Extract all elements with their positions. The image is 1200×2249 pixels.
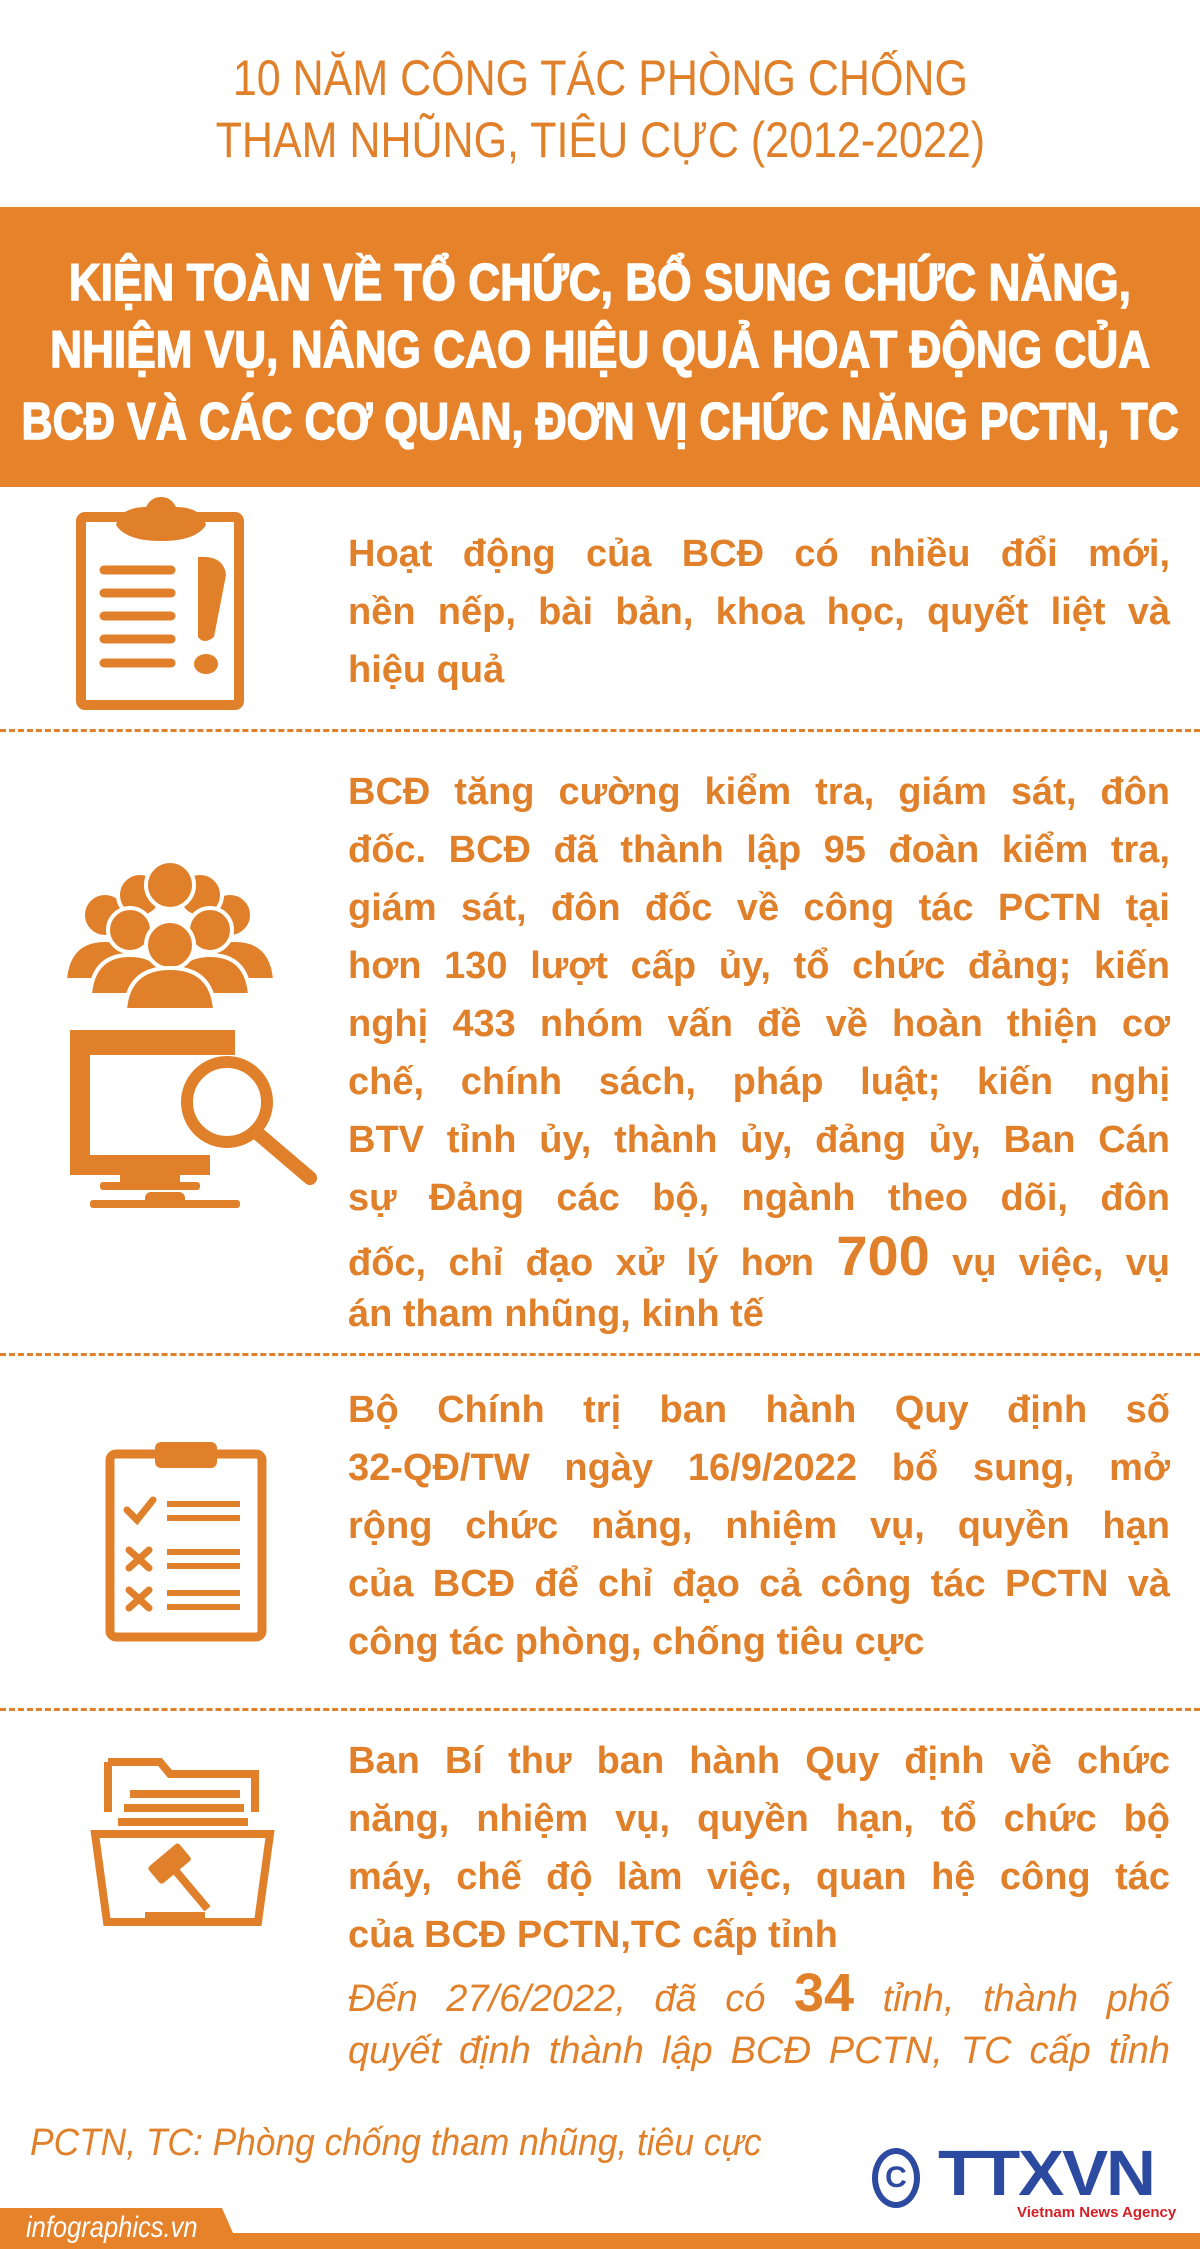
- title: 10 NĂM CÔNG TÁC PHÒNG CHỐNG: [232, 50, 968, 106]
- text block 2: hơn 130 lượt cấp ủy, tổ chức đảng; kiến: [348, 945, 1170, 987]
- text block 4: Đến 27/6/2022, đã có 34 tỉnh, thành phố: [348, 1963, 1170, 2023]
- text block 4: quyết định thành lập BCĐ PCTN, TC cấp tỉnh: [348, 2030, 1170, 2072]
- logo: TTXVN: [872, 2137, 1176, 2221]
- text block 1: nền nếp, bài bản, khoa học, quyết liệt và: [348, 591, 1170, 633]
- title: [215, 50, 985, 168]
- text block 2: nghị 433 nhóm vấn đề về hoàn thiện cơ: [348, 1003, 1170, 1045]
- banner: [0, 207, 1200, 487]
- text block 2: giám sát, đôn đốc về công tác PCTN tại: [348, 887, 1170, 929]
- text block 3: 32-QĐ/TW ngày 16/9/2022 bổ sung, mở: [348, 1447, 1170, 1489]
- text block 2: BCĐ tăng cường kiểm tra, giám sát, đôn: [348, 771, 1170, 813]
- icon: checklist: [106, 1442, 266, 1642]
- text block 3: Bộ Chính trị ban hành Quy định số: [348, 1389, 1170, 1431]
- footer bar: infographics.vn: [26, 2211, 198, 2244]
- text block 3: [348, 1389, 1170, 1663]
- icon: people and monitor with magnifier: [67, 863, 317, 1208]
- footer bar: [0, 2208, 1200, 2249]
- banner: NHIỆM VỤ, NÂNG CAO HIỆU QUẢ HOẠT ĐỘNG CỦA: [50, 321, 1150, 379]
- text block 3: rộng chức năng, nhiệm vụ, quyền hạn: [348, 1505, 1170, 1547]
- text block 2: [348, 771, 1170, 1335]
- text block 2: BTV tỉnh ủy, thành ủy, đảng ủy, Ban Cán: [348, 1119, 1170, 1161]
- footnote: PCTN, TC: Phòng chống tham nhũng, tiêu cực: [30, 2122, 762, 2164]
- text block 3: của BCĐ để chỉ đạo cả công tác PCTN và: [348, 1563, 1170, 1605]
- logo: TTXVN: TTXVN: [938, 2137, 1154, 2209]
- text block 2: đốc, chỉ đạo xử lý hơn 700 vụ việc, vụ: [348, 1224, 1170, 1287]
- logo: TTXVN: C: [885, 2161, 907, 2194]
- banner: KIỆN TOÀN VỀ TỔ CHỨC, BỔ SUNG CHỨC NĂNG,: [69, 254, 1131, 312]
- text block 4: của BCĐ PCTN,TC cấp tỉnh: [348, 1914, 838, 1956]
- text block 2: sự Đảng các bộ, ngành theo dõi, đôn: [348, 1177, 1170, 1219]
- text block 4: máy, chế độ làm việc, quan hệ công tác: [348, 1856, 1170, 1898]
- text block 1: Hoạt động của BCĐ có nhiều đổi mới,: [348, 533, 1170, 575]
- icon: clipboard with exclamation: [76, 497, 244, 710]
- text block 4: năng, nhiệm vụ, quyền hạn, tổ chức bộ: [348, 1798, 1170, 1840]
- text block 1: [348, 533, 1170, 691]
- icon: folder with gavel: [90, 1758, 275, 1926]
- text block 4: [348, 1740, 1173, 2072]
- text block 2: chế, chính sách, pháp luật; kiến nghị: [348, 1061, 1170, 1103]
- title: THAM NHŨNG, TIÊU CỰC (2012-2022): [215, 112, 985, 168]
- text block 3: công tác phòng, chống tiêu cực: [348, 1621, 924, 1663]
- text block 2: án tham nhũng, kinh tế: [348, 1293, 764, 1335]
- logo: TTXVN: Vietnam News Agency: [1017, 2204, 1176, 2221]
- text block 1: hiệu quả: [348, 649, 504, 691]
- text block 4: Ban Bí thư ban hành Quy định về chức: [348, 1740, 1170, 1782]
- banner: BCĐ VÀ CÁC CƠ QUAN, ĐƠN VỊ CHỨC NĂNG PCTN, TC: [21, 393, 1179, 451]
- text block 2: đốc. BCĐ đã thành lập 95 đoàn kiểm tra,: [348, 829, 1170, 871]
